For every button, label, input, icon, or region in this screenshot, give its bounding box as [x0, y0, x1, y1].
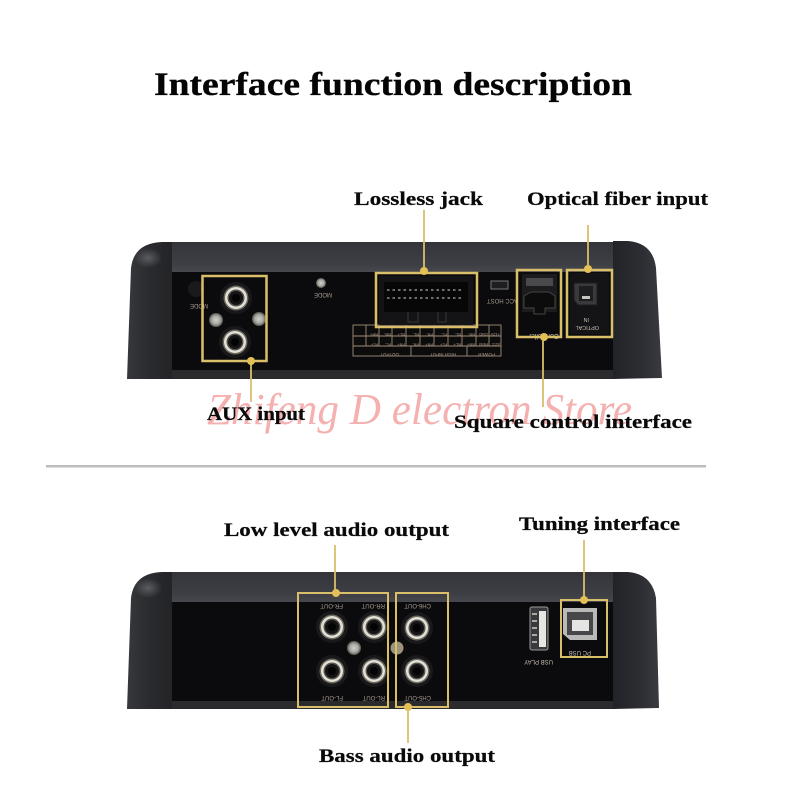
wiring connector — [379, 276, 473, 325]
optical port: IN — [583, 316, 589, 322]
left end cap — [127, 242, 172, 379]
AUX jacks — [209, 282, 266, 358]
black face panel — [172, 602, 613, 702]
right end cap — [613, 241, 662, 379]
wiring label table: FR+ — [425, 342, 433, 347]
USB A port — [524, 607, 553, 664]
wiring label table: REM — [479, 342, 488, 347]
wiring label table: RL+ — [453, 342, 461, 347]
USB B port — [563, 608, 597, 655]
controller port — [522, 274, 559, 339]
mode LED — [314, 278, 332, 297]
wiring label table: FR- — [412, 342, 419, 347]
highlight: lossless jack box and leader — [376, 210, 477, 327]
wiring label table: RR- — [383, 332, 391, 337]
highlight: bass output box and leader — [396, 593, 448, 743]
wiring label table: RL- — [454, 332, 461, 337]
controller port: Controller — [528, 332, 559, 339]
device body band — [170, 572, 615, 602]
low level RCA jacks — [316, 602, 390, 700]
wiring label table: POWER — [477, 352, 495, 357]
device body band — [170, 242, 615, 272]
divider — [46, 465, 706, 468]
low level RCA jacks: FR-OUT — [320, 602, 343, 608]
label: AUX input: AUX input — [207, 404, 306, 425]
highlight: square control box and leader — [517, 270, 561, 407]
highlight: optical box and leader — [567, 225, 612, 337]
wiring label table: FL+ — [439, 342, 447, 347]
label: Lossless jack: Lossless jack — [354, 189, 484, 210]
wiring label table: FR+ — [397, 342, 405, 347]
wiring label table: RR+ — [466, 342, 475, 347]
highlight: AUX input box and leader — [202, 276, 266, 402]
wiring label table — [353, 325, 501, 357]
low level RCA jacks: FL-OUT — [321, 694, 343, 700]
wiring label table: GND — [479, 332, 488, 337]
mode button — [188, 281, 208, 308]
label: Low level audio output: Low level audio output — [224, 520, 450, 541]
bass RCA jacks: CH5-OUT — [404, 694, 431, 700]
mode LED: MODE — [314, 291, 332, 297]
mode button: MODE — [190, 302, 208, 308]
wiring label table: FL+ — [370, 342, 378, 347]
wiring label table: ACC — [491, 342, 500, 347]
bottom strip — [172, 701, 613, 709]
wiring label table: +12V — [490, 332, 500, 337]
right end cap — [613, 572, 659, 709]
USB B port: PC USB — [569, 649, 591, 655]
ACC host switch: ACC HOST — [487, 297, 518, 303]
wiring label table: FR- — [426, 332, 433, 337]
watermark: Zhifeng D electron Store — [207, 385, 632, 434]
title: Interface function description — [154, 67, 632, 103]
highlight: tuning box and leader — [561, 540, 607, 657]
low level RCA jacks: RL-OUT — [362, 694, 385, 700]
label: Bass audio output: Bass audio output — [319, 746, 496, 767]
device: bottom rear panel — [127, 572, 659, 709]
black face panel — [172, 272, 613, 371]
optical port: OPTICAL — [575, 324, 599, 330]
label: Tuning interface: Tuning interface — [519, 514, 680, 535]
USB A port: USB PLAY — [524, 658, 553, 664]
highlight: low level output box and leader — [298, 545, 388, 707]
wiring label table: OUTPUT — [380, 352, 399, 357]
bottom strip — [172, 370, 613, 379]
low level RCA jacks: RR-OUT — [361, 602, 385, 608]
wiring label table: RL- — [412, 332, 419, 337]
wiring label table: RR- — [467, 332, 475, 337]
wiring label table: HIGH INPUT — [430, 352, 456, 357]
bass RCA jacks — [390, 602, 433, 700]
wiring label table: RR+ — [369, 332, 378, 337]
device: top rear panel — [127, 241, 662, 379]
bass RCA jacks: CH6-OUT — [404, 602, 431, 608]
label: Square control interface: Square control interface — [454, 412, 692, 433]
left end cap — [127, 572, 172, 709]
wiring label table: FL- — [384, 342, 391, 347]
ACC host switch — [487, 281, 518, 303]
optical port — [570, 273, 609, 334]
wiring label table: FL- — [440, 332, 447, 337]
wiring label table: RL+ — [397, 332, 405, 337]
label: Optical fiber input: Optical fiber input — [527, 189, 709, 210]
